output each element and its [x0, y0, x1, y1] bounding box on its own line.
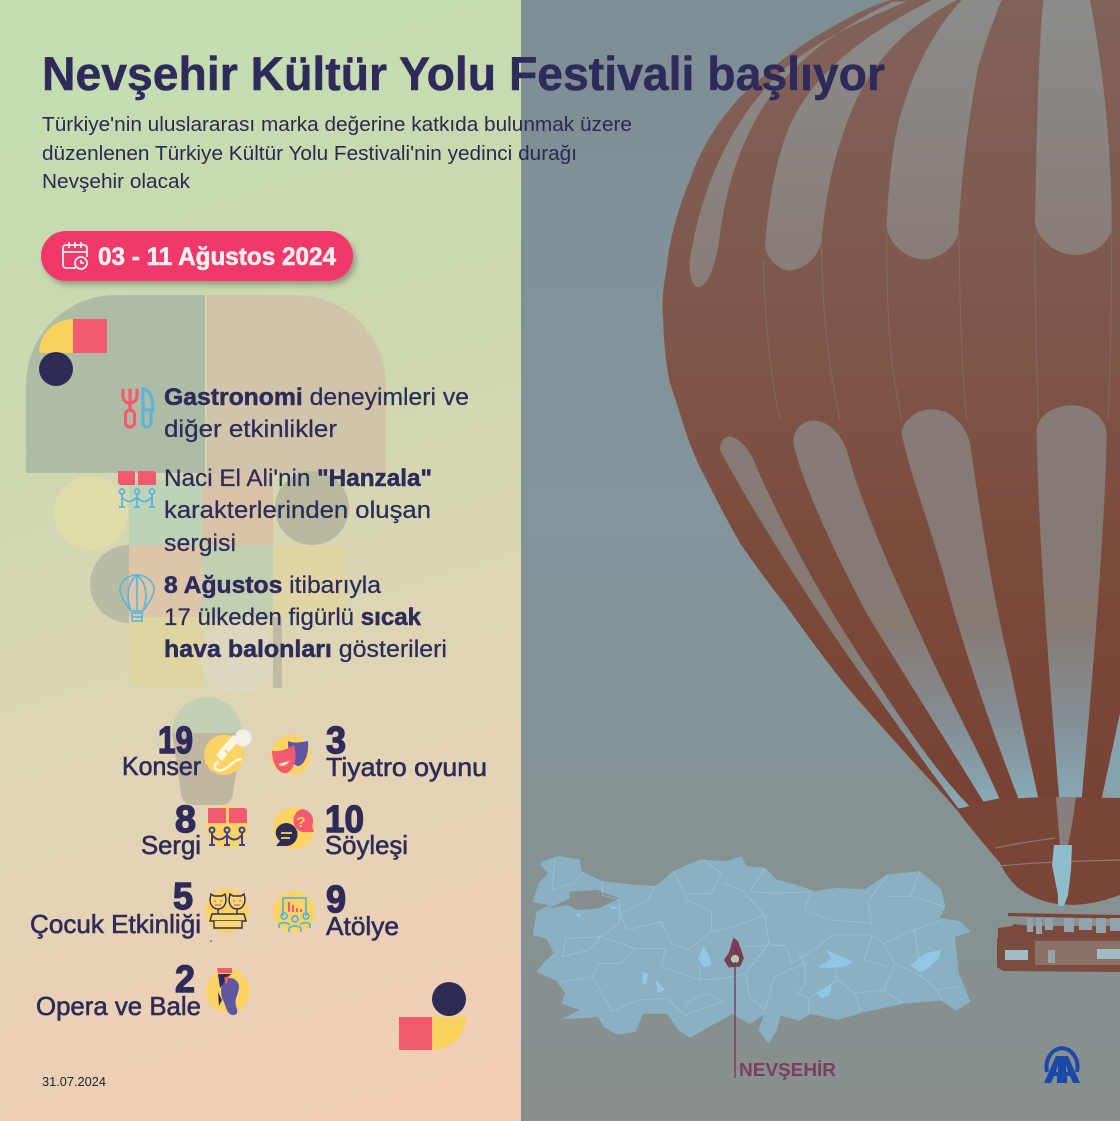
balloon skirt — [957, 797, 1120, 905]
panel: left gradient background — [0, 0, 521, 1121]
balloon upper light lobes — [690, 0, 1112, 420]
icon: exhibition — [206, 806, 248, 848]
subtitle: Türkiye'nin uluslararası marka değerine katkıda bulunmak üzere — [42, 114, 632, 136]
stat: 3 Tiyatro oyunu: 3 — [326, 720, 346, 762]
list item: gastronomy: diğer etkinlikler — [164, 416, 337, 443]
stat: 19 Konser: Konser — [122, 751, 201, 781]
accent shapes top left — [39, 319, 107, 386]
icon: microphone — [204, 730, 252, 775]
stat: 3 Tiyatro oyunu: Tiyatro oyunu — [326, 752, 487, 782]
marker — [732, 956, 738, 962]
title: Nevşehir Kültür Yolu Festivali başlıyor — [42, 47, 885, 100]
icon: fork and knife — [123, 389, 153, 427]
list item: hot air balloons — [120, 572, 447, 663]
stat: 9 Atölye — [273, 879, 399, 941]
date pill — [41, 231, 353, 281]
icon: signs and stanchions — [118, 471, 156, 507]
basket — [1008, 913, 1120, 919]
subtitle: düzenlenen Türkiye Kültür Yolu Festivali'nin yedinci durağı — [42, 143, 577, 165]
stat: 10 Söyleşi: Söyleşi — [325, 830, 408, 860]
logo: AA — [1044, 1048, 1080, 1083]
stat: 8 Sergi: 8 — [175, 799, 196, 841]
map label: NEVŞEHİR — [739, 1060, 836, 1080]
date: 31.07.2024 — [42, 1075, 106, 1089]
list item: exhibition: karakterlerinden oluşan — [164, 497, 431, 524]
Nevşehir province — [724, 937, 744, 967]
stat: 10 Söyleşi — [273, 799, 408, 860]
list item: hot air balloons: 17 ülkeden figürlü sıcak — [164, 604, 422, 631]
pill text: 03 - 11 Ağustos 2024 — [98, 243, 336, 271]
stat: 8 Sergi — [141, 799, 248, 860]
icon: speech bubbles: ? — [296, 814, 306, 831]
stat: 19 Konser: 19 — [158, 720, 193, 762]
text: Gastronomi deneyimleri ve — [164, 384, 469, 411]
stat: 9 Atölye: Atölye — [326, 911, 399, 941]
icon: ballet shoe — [206, 968, 250, 1015]
stat: 9 Atölye: 9 — [326, 879, 346, 921]
stat: 3 Tiyatro oyunu — [271, 720, 487, 782]
stat: 19 Konser — [122, 720, 252, 781]
icon: balloon — [120, 575, 154, 621]
list item: exhibition — [118, 465, 432, 557]
text: Naci El Ali'nin "Hanzala" — [164, 465, 432, 492]
balloon lower light lobes — [720, 405, 1120, 808]
icon: puppet show — [205, 889, 249, 942]
icon: workshop — [273, 891, 315, 933]
map of Turkey — [533, 857, 970, 1080]
stat: 2 Opera ve Bale: 2 — [175, 959, 195, 1001]
text: 8 Ağustos itibarıyla — [164, 572, 382, 599]
stat: 2 Opera ve Bale — [36, 959, 250, 1021]
decorative background shapes behind list — [26, 295, 386, 805]
list item: exhibition: sergisi — [164, 530, 236, 557]
icon: calendar — [63, 242, 87, 269]
stat: 5 Çocuk Etkinliği: 5 — [173, 876, 193, 918]
subtitle: Nevşehir olacak — [42, 171, 191, 193]
stat: 10 Söyleşi: 10 — [325, 799, 364, 841]
balloon envelope — [662, 0, 1120, 810]
accent shapes bottom right — [399, 982, 466, 1050]
subtitle — [42, 114, 632, 193]
leader line — [734, 962, 736, 1078]
panel: right balloon photo background — [521, 0, 1120, 1121]
stat: 2 Opera ve Bale: Opera ve Bale — [36, 991, 201, 1021]
stat: 5 Çocuk Etkinliği — [30, 876, 249, 942]
list item: hot air balloons: hava balonları gösterileri — [164, 636, 447, 663]
stat: 8 Sergi: Sergi — [141, 830, 201, 860]
burner flame — [1056, 797, 1076, 845]
stat: 5 Çocuk Etkinliği: Çocuk Etkinliği — [30, 909, 201, 939]
list item: gastronomy — [123, 384, 469, 443]
icon: theatre masks — [271, 735, 311, 775]
